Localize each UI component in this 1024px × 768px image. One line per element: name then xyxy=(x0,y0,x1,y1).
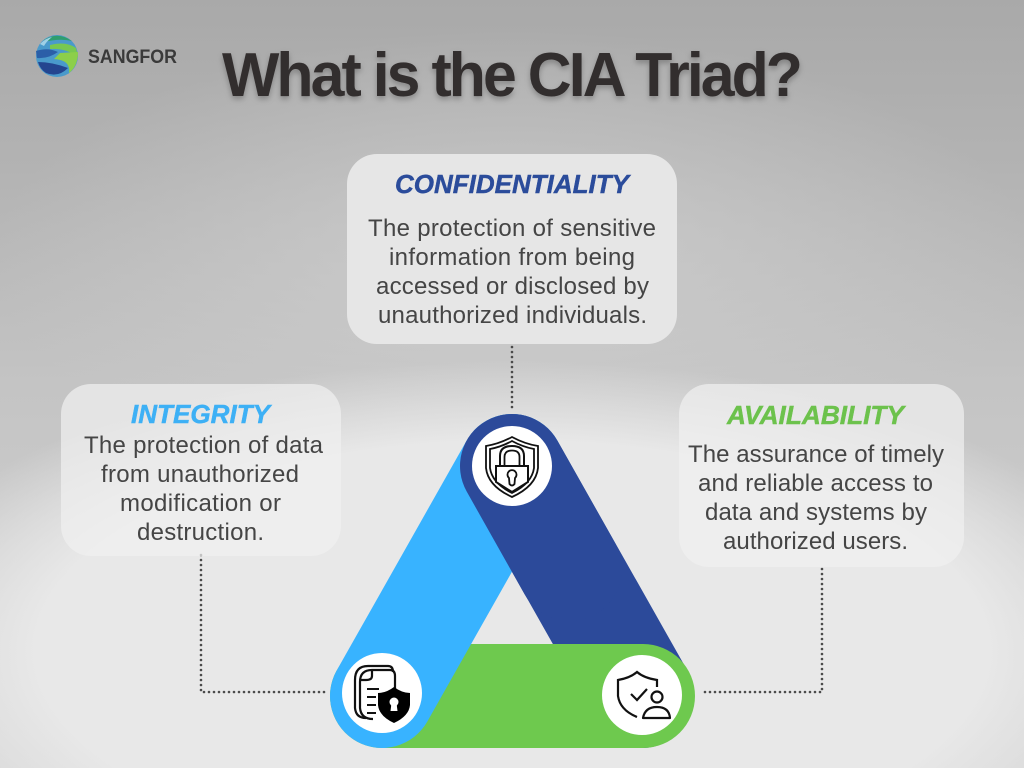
band overlap: confidentiality top xyxy=(512,466,570,569)
text: integrity description: from unauthorized xyxy=(101,461,299,488)
heading: availability: AVAILABILITY xyxy=(726,402,906,430)
panel: integrity xyxy=(61,384,341,556)
text: confidentiality description: The protection of sensitive xyxy=(368,215,656,242)
text: availability description: The assurance of timely xyxy=(688,441,944,468)
text: availability description: authorized users. xyxy=(723,528,908,555)
band: availability xyxy=(382,644,643,748)
text: integrity description: The protection of data xyxy=(84,432,324,459)
text: confidentiality description: information from being xyxy=(389,244,635,271)
title: What is the CIA Triad? xyxy=(222,41,800,110)
logo: Sangfor xyxy=(36,35,177,77)
heading: confidentiality: CONFIDENTIALITY xyxy=(395,171,631,199)
band: integrity xyxy=(382,466,512,696)
icon: shield with padlock xyxy=(472,426,552,506)
icon: shield with user check xyxy=(602,655,682,735)
panel: confidentiality xyxy=(347,154,677,344)
text: integrity description: destruction. xyxy=(137,519,264,546)
band: confidentiality xyxy=(512,466,642,696)
text: confidentiality description: accessed or disclosed by xyxy=(376,273,649,300)
connector: integrity xyxy=(201,555,325,692)
text: availability description: and reliable access to xyxy=(698,470,933,497)
icon: globe xyxy=(36,35,78,77)
text: availability description xyxy=(688,441,944,555)
icon: documents with shield xyxy=(342,653,422,733)
connector: confidentiality xyxy=(511,347,513,410)
logo wordmark: SANGFOR xyxy=(88,47,177,68)
triad diagram xyxy=(342,426,682,735)
heading: integrity: INTEGRITY xyxy=(131,401,272,429)
text: confidentiality description: unauthorized individuals. xyxy=(378,302,647,329)
text: integrity description: modification or xyxy=(120,490,281,517)
panel: availability xyxy=(679,384,964,567)
text: availability description: data and systems by xyxy=(705,499,927,526)
text: confidentiality description xyxy=(368,215,656,329)
text: integrity description xyxy=(84,432,324,546)
connector: availability xyxy=(702,569,822,692)
